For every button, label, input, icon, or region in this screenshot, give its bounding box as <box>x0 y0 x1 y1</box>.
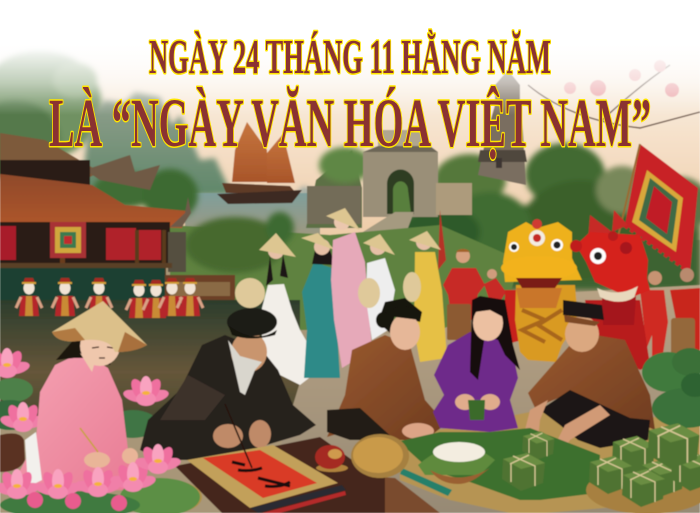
meadow <box>170 225 520 330</box>
woman in pink ao dai with hat <box>14 301 147 492</box>
water puppets <box>16 278 203 318</box>
banh chung cakes <box>502 423 700 507</box>
wooden floor <box>350 475 440 513</box>
calligraphy table <box>175 404 383 513</box>
yellow lion <box>501 219 582 362</box>
man in brown with turban <box>525 300 655 455</box>
flag with red banner <box>612 144 698 272</box>
base ground behind scene <box>0 240 700 513</box>
performers in red <box>484 268 700 360</box>
paved ground <box>260 285 700 513</box>
teal ao dai woman <box>301 233 340 378</box>
yellow ao dai woman <box>403 231 447 362</box>
bowl of rice <box>418 442 495 484</box>
lotus flowers upper left <box>0 348 170 432</box>
white-blue ao dai woman <box>358 234 395 340</box>
water puppet temple <box>0 133 191 302</box>
sky <box>0 0 700 240</box>
teal box <box>400 468 452 496</box>
bay water <box>185 193 320 241</box>
white ao dai woman <box>235 233 322 385</box>
ao dai women group <box>235 208 447 385</box>
cherry blossom branch <box>528 60 700 128</box>
wooden fence <box>165 275 235 302</box>
garden trees left <box>93 169 294 273</box>
lotus flowers foreground <box>0 444 182 511</box>
woman in purple <box>433 296 520 432</box>
drummer in red <box>443 249 485 340</box>
clay jar <box>0 433 25 472</box>
lily leaves left <box>0 378 158 438</box>
small flags <box>438 210 628 270</box>
pink ao dai woman <box>326 208 372 368</box>
junk boat <box>217 122 302 204</box>
round basket of grain <box>351 434 409 478</box>
top white fade <box>0 0 700 115</box>
woven mat <box>398 410 700 513</box>
trees behind gate <box>319 143 700 290</box>
rock wall by gate <box>306 150 362 228</box>
limestone mountains <box>80 92 320 200</box>
banana leaves <box>396 428 600 500</box>
pond <box>0 300 300 420</box>
red lion <box>570 231 650 370</box>
ancient stone gate <box>307 130 472 240</box>
lotus leaves right <box>642 348 700 428</box>
apple on dish <box>315 445 348 472</box>
woman in brown <box>327 298 446 440</box>
title <box>49 29 651 161</box>
table corner right <box>350 462 385 513</box>
pagoda tower <box>478 70 527 185</box>
large lily leaf <box>0 478 202 513</box>
round tray basket <box>586 466 700 513</box>
elder calligrapher <box>140 308 316 460</box>
misty forest top left <box>0 50 102 180</box>
